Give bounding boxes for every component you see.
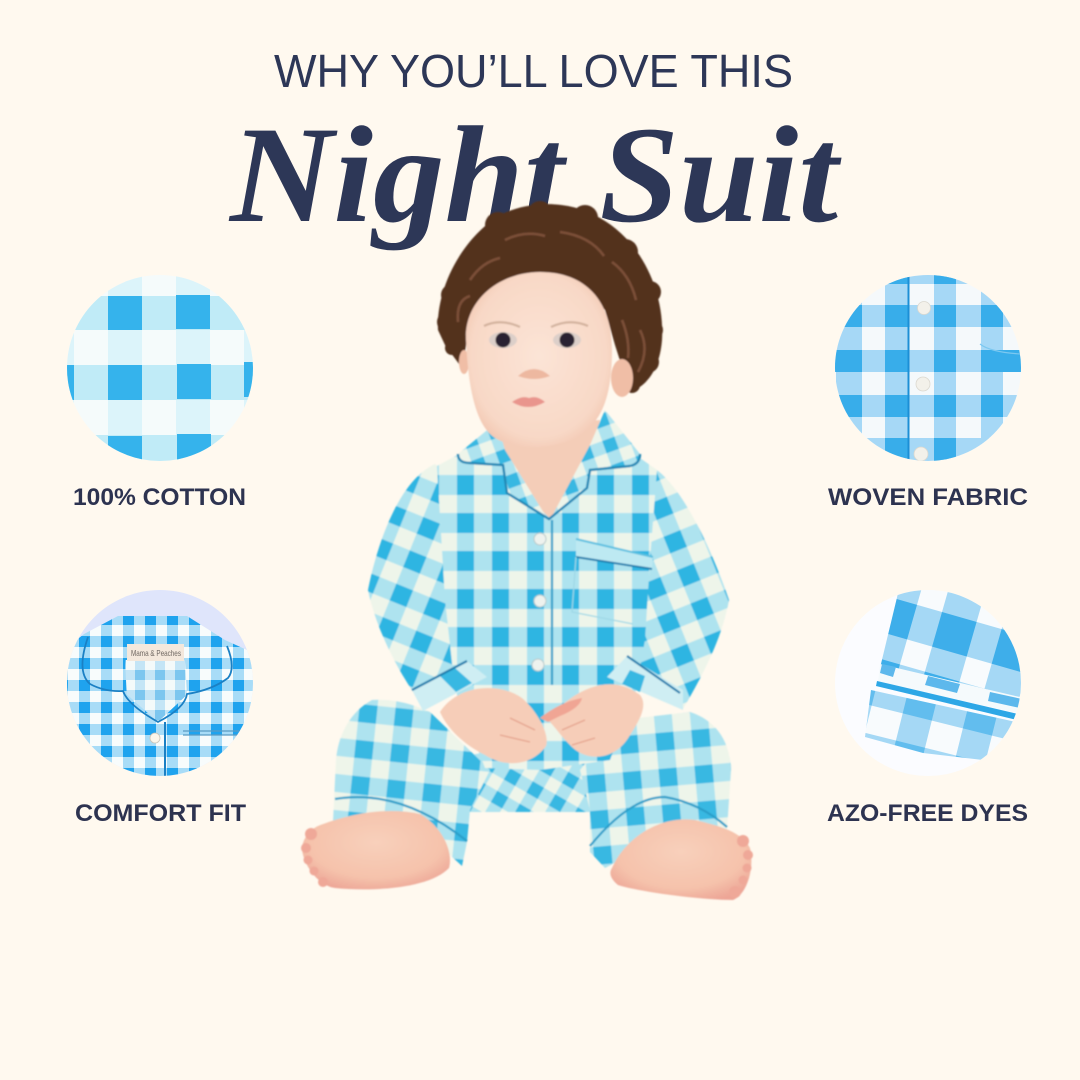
mouth xyxy=(512,397,545,407)
pink fingertips xyxy=(540,698,582,722)
illustration: seated baby in gingham pyjamas xyxy=(301,201,753,900)
panel: comfort fit xyxy=(67,590,253,821)
eyes xyxy=(489,332,581,348)
right hand xyxy=(548,684,643,757)
label: comfort fit: COMFORT FIT xyxy=(75,800,246,827)
hair xyxy=(437,201,663,393)
chest pocket xyxy=(572,539,653,624)
title: night suit: Night Suit xyxy=(228,98,842,251)
ears xyxy=(459,350,633,397)
neck xyxy=(500,420,600,518)
swatch: shirt collar close-up xyxy=(67,590,253,776)
shirt body xyxy=(437,430,657,770)
right cuff xyxy=(607,656,683,710)
left foot xyxy=(301,811,450,889)
right sleeve xyxy=(600,466,729,709)
panel: woven fabric xyxy=(828,270,1030,511)
swatch: cotton gingham close-up xyxy=(67,275,253,461)
collar xyxy=(458,410,640,519)
finger lines xyxy=(500,718,595,745)
swatch: sleeve cuff close-up xyxy=(835,590,1021,776)
label: 100% cotton: 100% COTTON xyxy=(73,484,246,511)
swatch: woven fabric with buttons xyxy=(835,275,1021,461)
heading: why you'll love this: WHY YOU’LL LOVE THIS xyxy=(274,45,793,97)
pyjama trousers xyxy=(333,700,731,868)
left sleeve xyxy=(368,464,490,690)
panel: azo-free dyes xyxy=(827,585,1030,827)
face xyxy=(466,272,612,447)
infographic canvas xyxy=(67,54,1028,901)
label: azo-free dyes: AZO-FREE DYES xyxy=(827,800,1028,827)
brows xyxy=(484,322,588,327)
left hand xyxy=(440,688,547,763)
left cuff xyxy=(412,661,487,711)
nose xyxy=(518,369,550,379)
panel: 100% cotton xyxy=(67,275,253,505)
label: woven fabric: WOVEN FABRIC xyxy=(828,484,1028,511)
placket and buttons xyxy=(532,520,552,685)
right foot xyxy=(610,819,753,900)
swatch: shirt collar close-up: Mama & Peaches xyxy=(131,648,181,658)
